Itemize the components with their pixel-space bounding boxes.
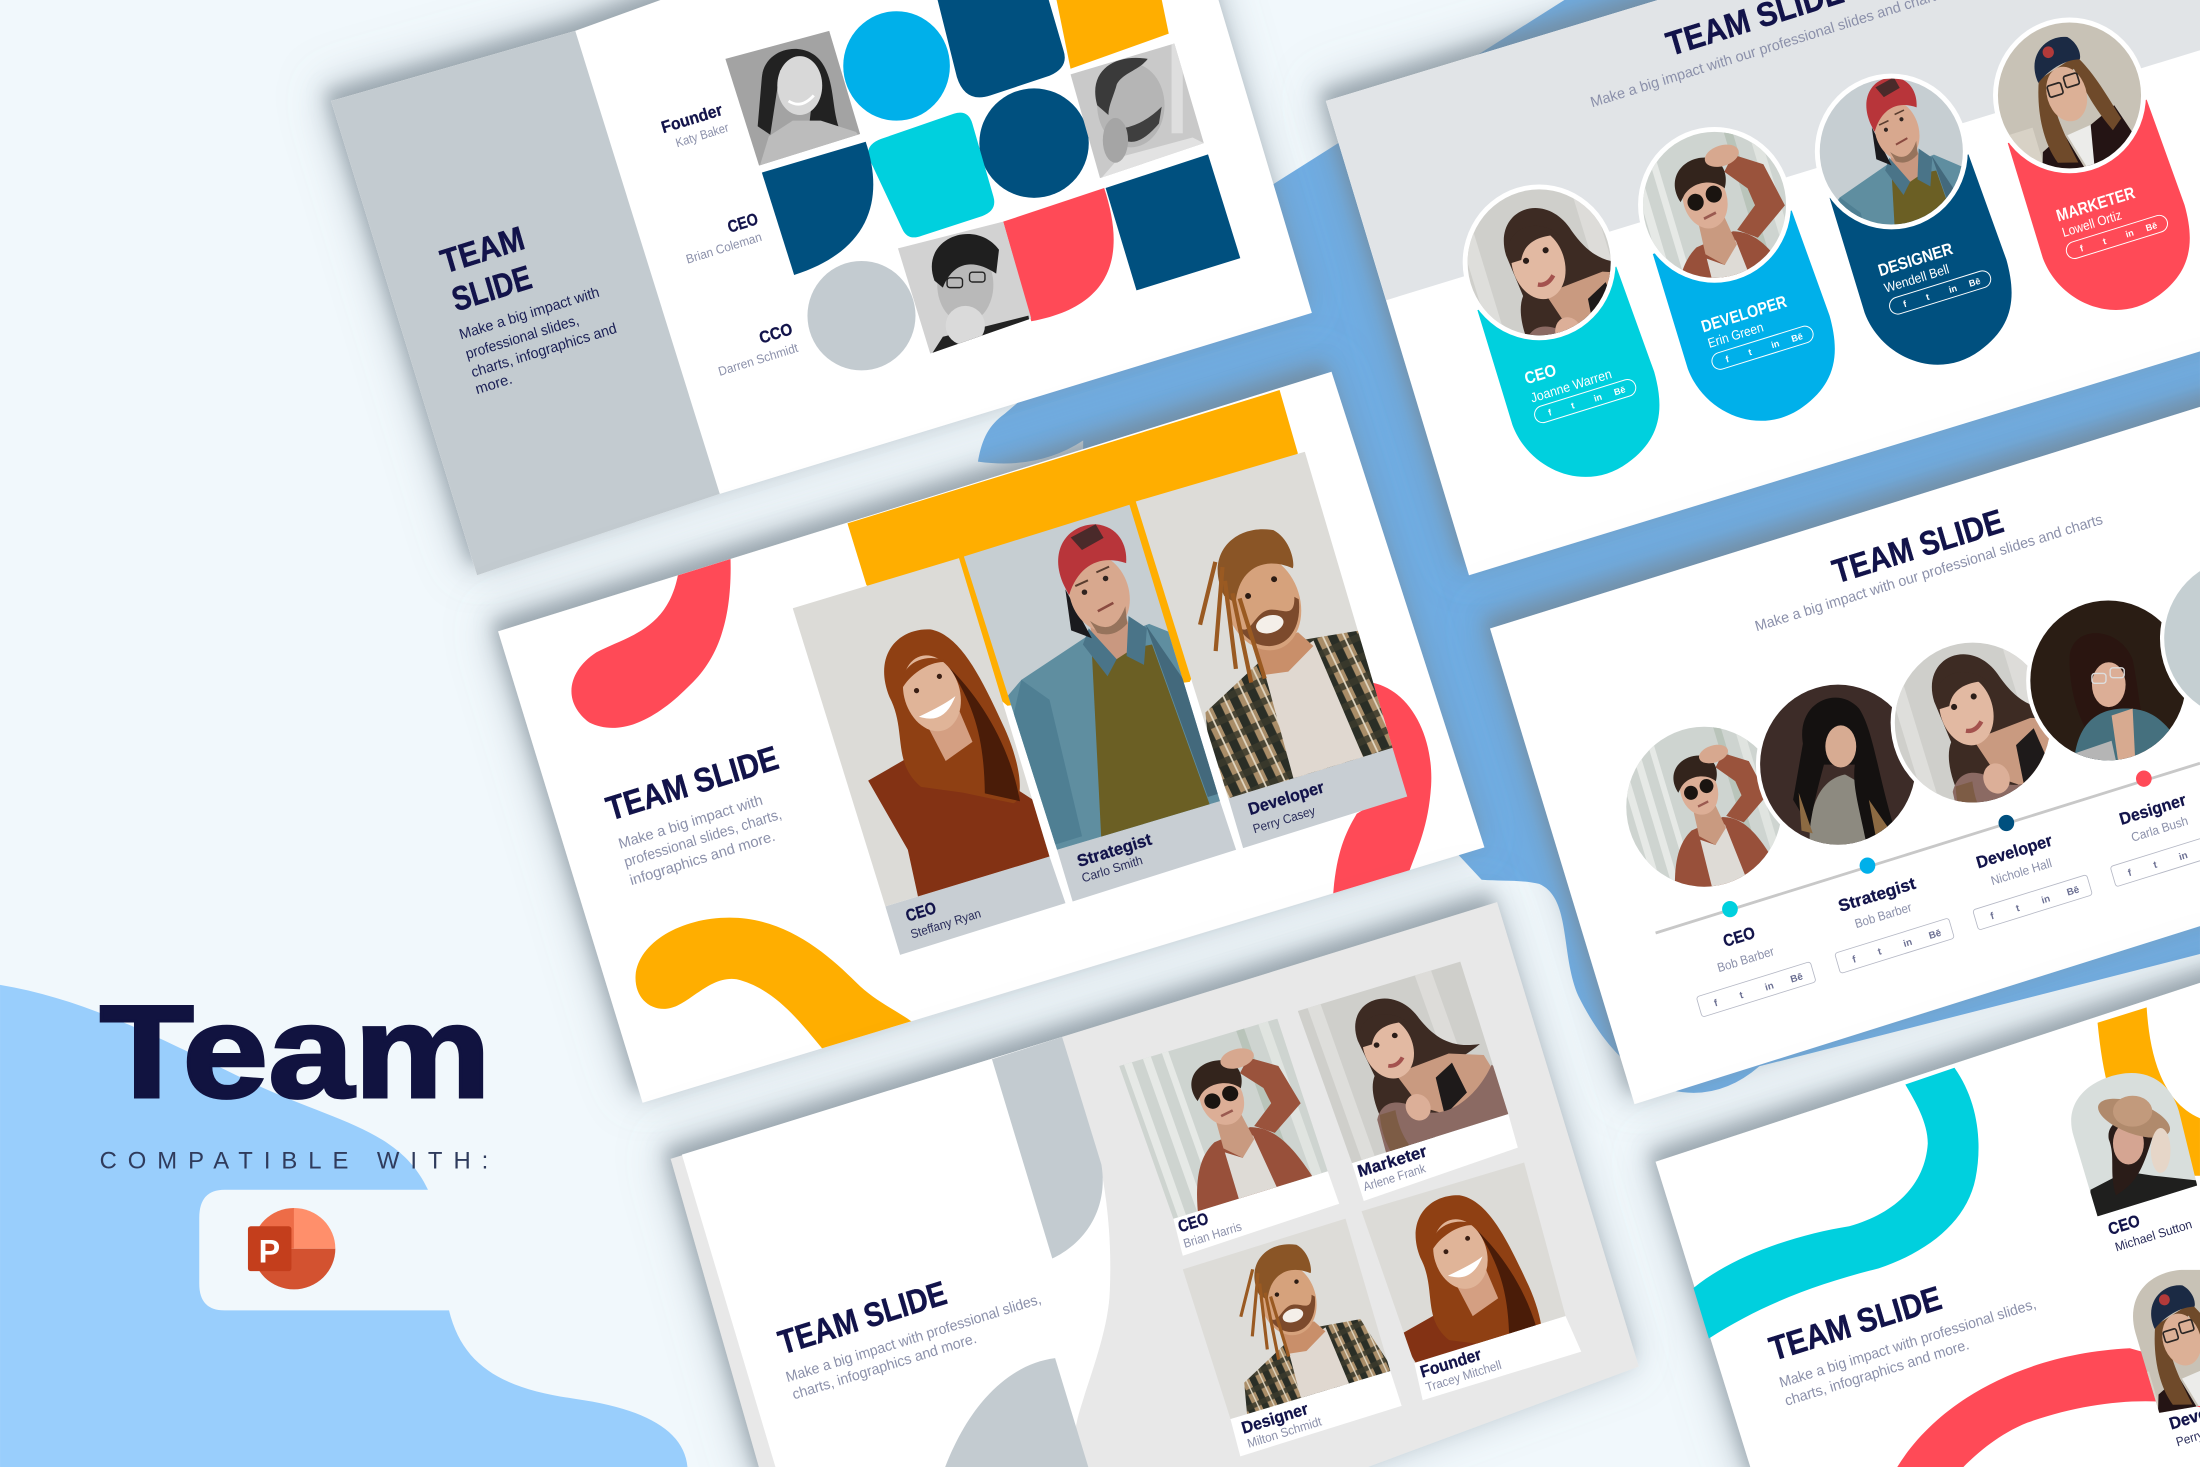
member: Designer: f — [2127, 867, 2134, 879]
grey blob top — [992, 1037, 1103, 1259]
member: Strategist: Bē — [1928, 928, 1943, 942]
heading: TEAM SLIDE — [774, 1275, 951, 1362]
pill: Designer: Wendell Bell — [1882, 261, 1951, 296]
white wave area — [682, 1037, 1110, 1467]
subheading: Make a big impact with our professional slides and charts — [1753, 512, 2105, 635]
member: CEO: t — [1738, 990, 1745, 1002]
member: Strategist: t — [1877, 946, 1884, 958]
grey header band — [1326, 0, 2200, 300]
portrait circles — [1540, 517, 2200, 990]
card: Strategist — [882, 425, 1338, 919]
card: Strategist: Strategist — [1075, 830, 1154, 871]
card: Founder: Tracey Mitchell — [1424, 1358, 1503, 1395]
pill: Developer: Erin Green — [1706, 319, 1765, 351]
label: CEO: Michael Sutton — [2113, 1217, 2194, 1254]
pill: CEO: t — [1570, 400, 1576, 411]
panel: slide 1 mosaic — [331, 0, 1312, 575]
pill: Marketer: MARKETER — [2054, 183, 2137, 226]
pill: Developer — [1638, 127, 1835, 421]
card: Developer: Perry Casey — [1251, 803, 1317, 836]
pill: Designer: f — [1902, 298, 1909, 309]
member: Strategist: in — [1902, 937, 1914, 950]
decorative blobs — [571, 390, 1431, 1055]
member: Strategist: Bob Barber — [1853, 900, 1913, 931]
pill: Marketer: t — [2102, 236, 2107, 247]
body text: Make a big impact with professional slides, — [1778, 1296, 2038, 1391]
card: Founder — [1253, 1055, 1682, 1467]
card: CEO: CEO — [904, 898, 938, 926]
panel: slide 6 arches — [1656, 968, 2200, 1467]
body text: professional slides, — [464, 313, 581, 363]
body text: charts, infographics and — [469, 321, 619, 381]
icon: PowerPoint: P — [259, 1234, 280, 1270]
labels: CEO — [725, 209, 760, 237]
heading: TEAM SLIDE — [602, 740, 783, 828]
background shape: blue band — [978, 0, 2200, 1093]
pill: Marketer: Bē — [2144, 220, 2158, 233]
pill: CEO: f — [1547, 407, 1554, 418]
pill: Marketer: in — [2124, 227, 2135, 239]
member: Developer: t — [2015, 903, 2022, 915]
photo: founder — [726, 31, 860, 166]
card: Strategist: Carlo Smith — [1080, 853, 1144, 885]
member: Developer: Nichole Hall — [1989, 856, 2053, 888]
mosaic shapes — [762, 0, 1240, 370]
pill: Marketer: Lowell Ortiz — [2060, 207, 2123, 240]
member: Developer: f — [1989, 911, 1996, 922]
card: Designer — [1132, 1125, 1483, 1467]
body text: charts, infographics and more. — [791, 1331, 979, 1403]
panel: slide 4 timeline — [1490, 393, 2200, 1104]
body text: Make a big impact with professional slides, — [784, 1292, 1043, 1386]
member: CEO: Bob Barber — [1716, 944, 1776, 975]
heading: TEAM SLIDE — [1828, 503, 2008, 591]
timeline line and dots — [1656, 763, 2200, 933]
pill: CEO: in — [1593, 392, 1603, 404]
pill: CEO: CEO — [1522, 360, 1558, 388]
body text: infographics and more. — [628, 829, 777, 889]
member: CEO: f — [1713, 998, 1720, 1009]
card: Marketer: Arlene Frank — [1362, 1161, 1428, 1194]
card: Founder: Founder — [1418, 1344, 1484, 1382]
card: Designer: Designer — [1239, 1399, 1311, 1438]
pill: CEO: Bē — [1613, 384, 1627, 397]
body text — [617, 793, 784, 889]
pill: Developer: t — [1747, 347, 1753, 357]
teal wave — [1693, 1068, 1979, 1338]
card: Developer — [1053, 372, 1525, 905]
card: CEO — [1034, 934, 1439, 1317]
labels: Darren Schmidt — [717, 341, 800, 379]
member: Designer: in — [2178, 850, 2189, 863]
background blob: light blue — [0, 985, 688, 1467]
member: CEO — [1696, 923, 1816, 1017]
member: Designer: t — [2152, 859, 2159, 871]
photo: man thinking — [898, 222, 1032, 354]
card: CEO: Brian Harris — [1182, 1220, 1243, 1251]
pill: Designer — [1815, 74, 2012, 365]
member: CEO: in — [1764, 980, 1775, 994]
pill: CEO — [1462, 184, 1660, 477]
panel: slide 3 pills — [1326, 0, 2200, 575]
photo: hat woman — [2062, 1066, 2200, 1223]
body text: Make a big impact with — [617, 793, 765, 853]
member: Developer — [1973, 831, 2092, 930]
panel: slide 2 three portraits — [498, 372, 1525, 1103]
red arc — [1897, 1348, 2200, 1467]
card: CEO — [711, 478, 1169, 982]
member: Designer: Designer — [2117, 790, 2189, 829]
pill: Designer: in — [1948, 283, 1958, 295]
grey side panel — [331, 31, 720, 575]
card: Designer: Milton Schmidt — [1246, 1414, 1324, 1451]
member: CEO: CEO — [1721, 923, 1757, 951]
body text: Make a big impact with — [458, 285, 601, 343]
labels: CCO — [757, 319, 795, 348]
pill: Designer: Bē — [1968, 276, 1982, 289]
member: Designer: Carla Bush — [2130, 814, 2190, 845]
labels: Founder — [659, 100, 725, 137]
member: Strategist: Strategist — [1836, 874, 1918, 916]
pill: Designer: t — [1925, 292, 1931, 302]
body text: professional slides, charts, — [622, 807, 784, 871]
pill: Marketer: f — [2079, 243, 2085, 254]
heading: TEAM — [437, 220, 529, 281]
pill: Developer: f — [1724, 354, 1731, 365]
pill: Marketer — [1993, 18, 2190, 310]
pill: Developer: in — [1770, 338, 1781, 350]
member: Developer: in — [2040, 893, 2052, 907]
title: Team: Team — [100, 978, 491, 1125]
card: Marketer: Marketer — [1355, 1141, 1429, 1181]
yellow wave — [2098, 1007, 2200, 1176]
photo: man on phone — [1070, 44, 1204, 178]
card: CEO: CEO — [1176, 1209, 1211, 1236]
member: Strategist — [1835, 874, 1954, 974]
grey blob bottom — [943, 1358, 1090, 1467]
body text: charts, infographics and more. — [1783, 1337, 1971, 1410]
label: CEO: CEO — [2106, 1211, 2142, 1239]
body text: more. — [474, 371, 514, 398]
card: Developer: Developer — [1246, 777, 1327, 819]
member: Strategist: f — [1851, 954, 1858, 966]
pill: Developer: DEVELOPER — [1699, 292, 1789, 336]
photo: long-hair man — [2032, 1187, 2200, 1467]
labels — [659, 100, 800, 379]
member: Developer: Developer — [1974, 831, 2055, 872]
card: CEO: Steffany Ryan — [909, 906, 983, 942]
heading line 2: SLIDE — [448, 259, 536, 319]
card: Marketer — [1211, 876, 1623, 1259]
labels: Katy Baker — [674, 121, 730, 150]
heading: TEAM SLIDE — [1765, 1280, 1946, 1369]
member: CEO: Bē — [1789, 971, 1805, 986]
icon: PowerPoint — [248, 1208, 335, 1289]
labels: Brian Coleman — [684, 230, 763, 267]
pill: Developer: Bē — [1790, 331, 1804, 344]
body text — [458, 285, 619, 398]
member: Developer: Bē — [2066, 884, 2081, 899]
pill: Designer: DESIGNER — [1876, 239, 1955, 280]
panel: slide 5 portrait grid — [671, 876, 1682, 1467]
subtitle: compatible with: COMPATIBLE WITH: — [100, 1148, 488, 1175]
pill: CEO: Joanne Warren — [1529, 366, 1613, 406]
member: Designer — [2110, 790, 2200, 887]
